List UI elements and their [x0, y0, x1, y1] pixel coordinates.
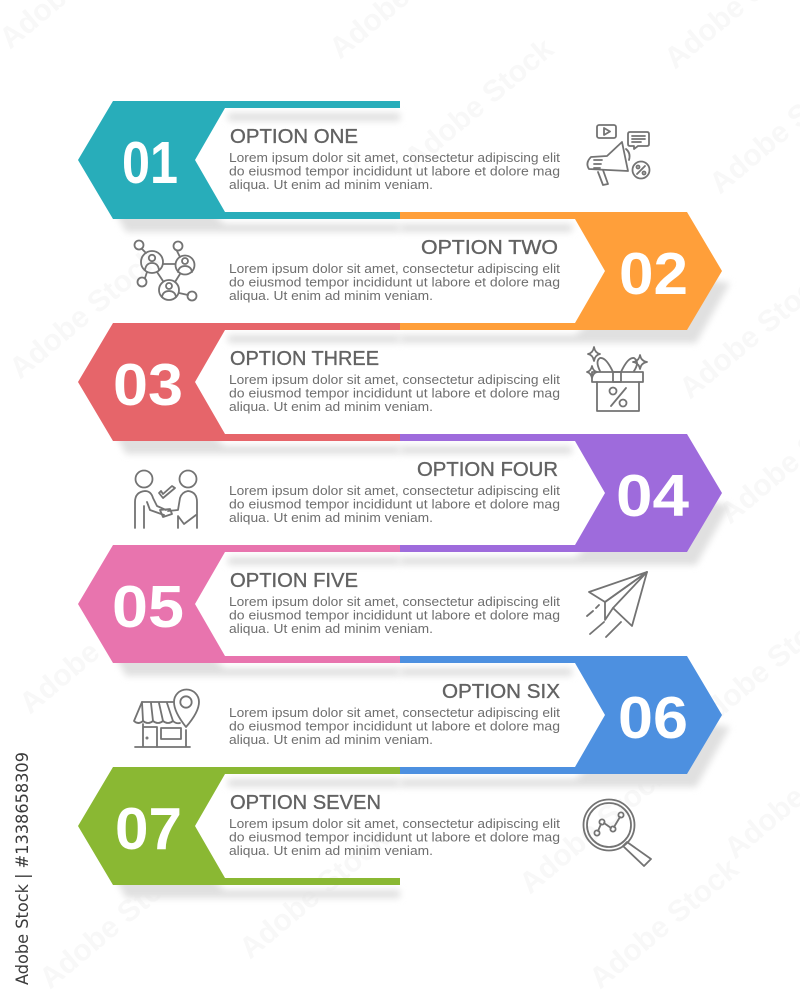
- icon: paper plane: [587, 572, 647, 637]
- text block: option five: do eiusmod tempor incididunt ut labore et dolore mag: [229, 608, 560, 622]
- band 06: blue right arrow: [400, 656, 730, 787]
- text block: option seven: [229, 792, 560, 858]
- text block: option three: do eiusmod tempor incididunt ut labore et dolore mag: [229, 386, 560, 400]
- text block: option three: Lorem ipsum dolor sit amet, consectetur adipiscing elit: [229, 372, 560, 387]
- text block: option two: aliqua. Ut enim ad minim veniam.: [229, 288, 433, 303]
- number 02: 02: [619, 241, 688, 307]
- text block: option one: do eiusmod tempor incididunt ut labore et dolore mag: [229, 164, 560, 178]
- text block: option two: Lorem ipsum dolor sit amet, consectetur adipiscing elit: [229, 261, 560, 276]
- number 05: 05: [112, 574, 184, 640]
- number 06: 06: [618, 685, 688, 751]
- text block: option six: [229, 681, 560, 747]
- band 02: orange right arrow: [400, 212, 730, 343]
- text block: option five: Lorem ipsum dolor sit amet, consectetur adipiscing elit: [229, 594, 560, 609]
- number 04: 04: [616, 463, 689, 529]
- watermark pattern: Adobe Stock: [513, 757, 675, 900]
- text block: option five: aliqua. Ut enim ad minim veniam.: [229, 621, 433, 636]
- watermark pattern: Adobe Stock: [398, 32, 560, 175]
- icon: store with location pin: [134, 690, 199, 747]
- text block: option seven: Lorem ipsum dolor sit amet, consectetur adipiscing elit: [229, 816, 560, 831]
- text block: option one: Lorem ipsum dolor sit amet, consectetur adipiscing elit: [229, 150, 560, 165]
- watermark pattern: Adobe Stock: [13, 577, 175, 720]
- text block: option two: OPTION TWO: [421, 237, 558, 259]
- band 07: green left arrow: [78, 767, 400, 898]
- text block: option one: OPTION ONE: [230, 126, 358, 148]
- icon: handshake with check: [135, 470, 197, 528]
- watermark pattern: Adobe Stock: [583, 852, 745, 995]
- text block: option four: Lorem ipsum dolor sit amet, consectetur adipiscing elit: [229, 483, 560, 498]
- text block: option six: do eiusmod tempor incididunt ut labore et dolore mag: [229, 718, 560, 734]
- text block: option five: OPTION FIVE: [230, 570, 358, 592]
- text block: option three: aliqua. Ut enim ad minim veniam.: [229, 399, 433, 414]
- number 03: 03: [113, 352, 183, 418]
- band 03: red left arrow: [78, 323, 400, 454]
- text block: option six: Lorem ipsum dolor sit amet, consectetur adipiscing elit: [229, 705, 560, 720]
- text block: option seven: OPTION SEVEN: [230, 792, 381, 814]
- text block: option two: [229, 237, 560, 303]
- text block: option four: aliqua. Ut enim ad minim veniam.: [229, 510, 433, 525]
- icon: magnifier with line chart: [584, 800, 651, 866]
- text block: option three: OPTION THREE: [230, 348, 379, 370]
- text block: option seven: aliqua. Ut enim ad minim veniam.: [229, 843, 433, 858]
- watermark pattern: Adobe Stock: [233, 822, 395, 965]
- text block: option five: [229, 570, 560, 636]
- stock id caption: Adobe Stock | #1338658309: [13, 752, 33, 985]
- band 05: pink left arrow: [78, 545, 400, 676]
- number 01: 01: [122, 130, 178, 196]
- text block: option seven: do eiusmod tempor incididunt ut labore et dolore mag: [229, 830, 560, 844]
- text block: option three: [229, 348, 560, 414]
- band 01: teal left arrow: [78, 101, 400, 232]
- text block: option four: [229, 459, 560, 525]
- text block: option two: do eiusmod tempor incididunt ut labore et dolore mag: [229, 274, 560, 290]
- text block: option one: aliqua. Ut enim ad minim veniam.: [229, 177, 433, 192]
- text block: option four: do eiusmod tempor incididunt ut labore et dolore mag: [229, 496, 560, 512]
- icon: megaphone with media bubbles: [587, 125, 650, 185]
- watermark pattern: Adobe Stock: [3, 242, 165, 385]
- text block: option four: OPTION FOUR: [417, 459, 558, 481]
- icon: gift box with percent: [587, 347, 647, 411]
- text block: option six: aliqua. Ut enim ad minim veniam.: [229, 732, 433, 747]
- number 07: 07: [115, 796, 182, 862]
- watermark pattern: Adobe Stock: [33, 852, 195, 995]
- band 04: purple right arrow: [400, 434, 730, 565]
- text block: option six: OPTION SIX: [442, 681, 560, 703]
- icon: people network: [134, 240, 196, 300]
- text block: option one: [229, 126, 560, 192]
